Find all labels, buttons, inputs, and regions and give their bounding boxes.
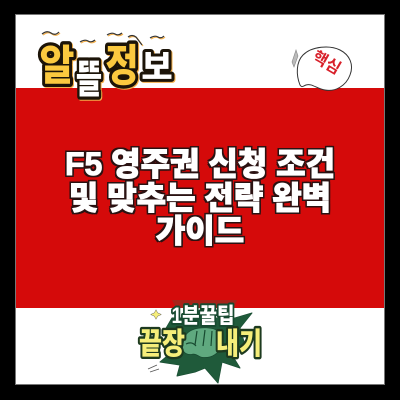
logo: 알뜰정보: [40, 32, 173, 102]
logo: 알뜰정보: 뜰: [76, 59, 102, 102]
red title band: [16, 88, 384, 308]
sparkle icon: [151, 310, 161, 319]
badge heading: 1분꿀팁: [171, 304, 235, 328]
title: 가이드: [156, 213, 244, 249]
speech bubble: 핵심: [292, 47, 352, 90]
title: F5 영주권 신청 조건: [65, 146, 335, 182]
badge text left: 끝장: [139, 327, 185, 361]
logo: 알뜰정보: 보: [141, 49, 173, 87]
fist icon: [183, 328, 221, 357]
title: [65, 146, 335, 249]
logo: 알뜰정보: 정: [105, 43, 139, 91]
speech bubble: 핵심: 핵심: [309, 47, 344, 78]
badge text right: 내기: [216, 327, 262, 361]
green starburst: [160, 313, 252, 383]
badge: 1분꿀팁 끝장내기: [139, 300, 262, 383]
title: 및 맞추는 전략 완벽: [69, 180, 331, 216]
dark red burst top: [172, 300, 237, 308]
motion lines: [148, 365, 159, 372]
logo: 알뜰정보: 알: [40, 43, 74, 89]
